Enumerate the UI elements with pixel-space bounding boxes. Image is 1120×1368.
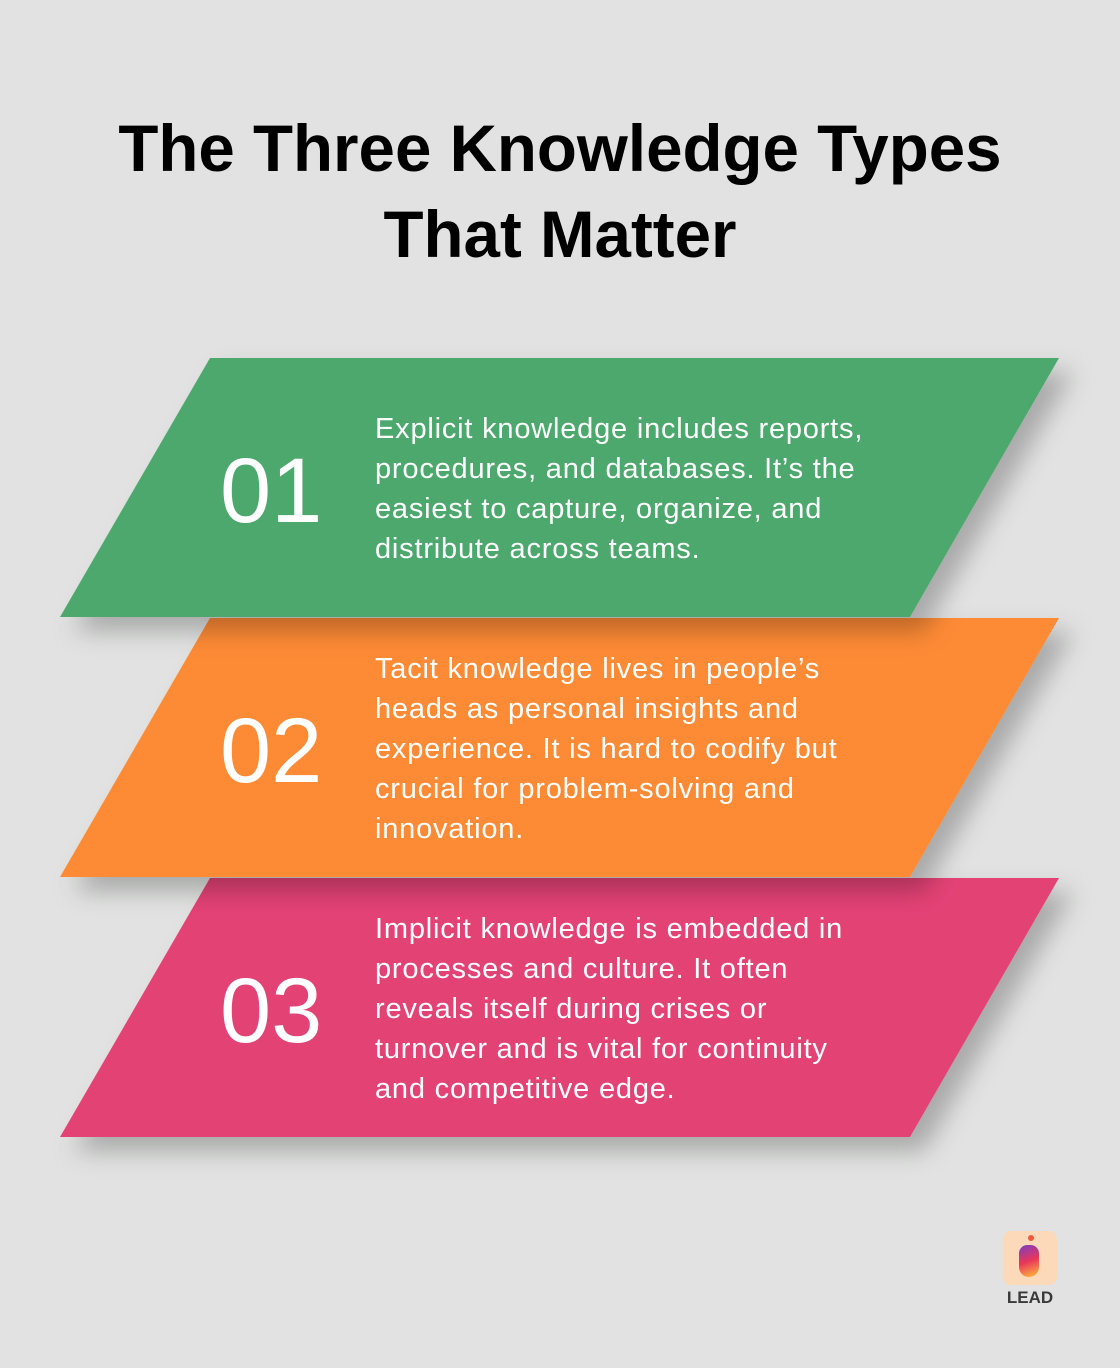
text 3 — [375, 913, 843, 1105]
text 2: innovation. — [375, 813, 524, 845]
band 2 — [60, 618, 1059, 877]
logo: LEAD — [1007, 1288, 1053, 1307]
title: The Three Knowledge Types — [118, 112, 1002, 185]
text 2 — [375, 653, 837, 845]
text 1 — [375, 413, 863, 565]
text 3: turnover and is vital for continuity — [375, 1033, 828, 1065]
text 1: easiest to capture, organize, and — [375, 493, 822, 525]
title: That Matter — [384, 198, 736, 271]
text 3: and competitive edge. — [375, 1073, 676, 1105]
text 1: Explicit knowledge includes reports, — [375, 413, 863, 445]
text 1: distribute across teams. — [375, 533, 700, 565]
number 01: 01 — [220, 440, 322, 542]
logo — [1003, 1231, 1057, 1307]
text 3: Implicit knowledge is embedded in — [375, 913, 843, 945]
text 2: experience. It is hard to codify but — [375, 733, 837, 765]
text 2: heads as personal insights and — [375, 693, 799, 725]
text 2: Tacit knowledge lives in people’s — [375, 653, 820, 685]
text 3: reveals itself during crises or — [375, 993, 767, 1025]
text 1: procedures, and databases. It’s the — [375, 453, 856, 485]
title — [118, 112, 1002, 271]
text 3: processes and culture. It often — [375, 953, 788, 985]
number 02: 02 — [220, 700, 322, 802]
text 2: crucial for problem-solving and — [375, 773, 795, 805]
band 1 — [60, 358, 1059, 617]
number 03: 03 — [220, 960, 322, 1062]
band 3 — [60, 878, 1059, 1137]
